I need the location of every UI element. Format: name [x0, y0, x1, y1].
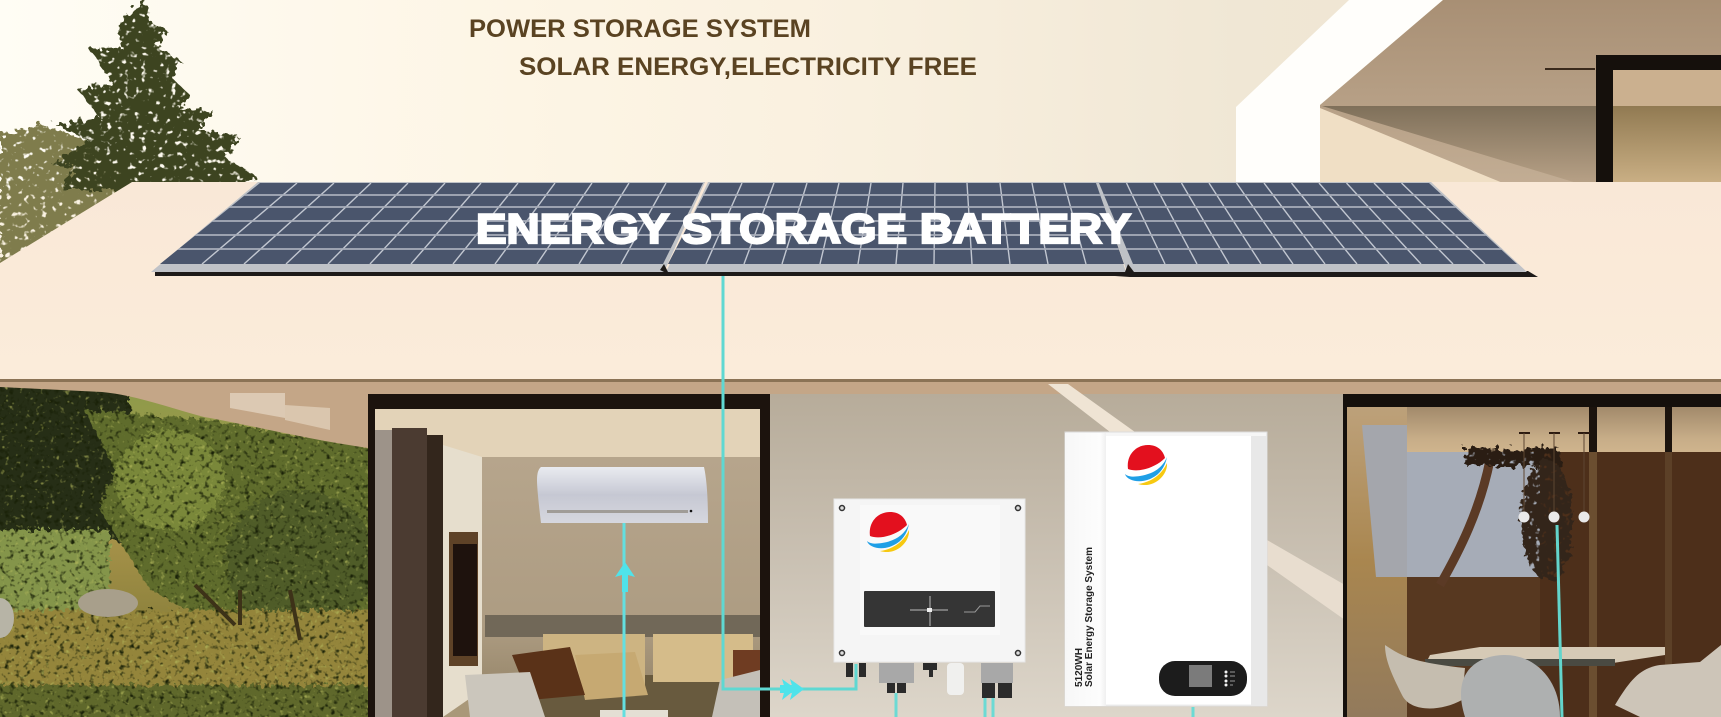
- roof soffit underside: [0, 379, 1721, 448]
- dining table: [1425, 647, 1665, 666]
- solar panel left: [151, 182, 705, 272]
- heading: power storage system: POWER STORAGE SYSTEM: [469, 15, 811, 43]
- battery control display: [1159, 661, 1247, 696]
- upper-right white wall band: [1236, 0, 1443, 190]
- subheading: solar energy, electricity free: SOLAR ENERGY,ELECTRICITY FREE: [519, 53, 977, 81]
- wiring from solar panels to inverter: [723, 276, 856, 689]
- mounting screws: [840, 506, 1020, 656]
- wiring up to air conditioner: [622, 523, 626, 717]
- flow arrow into inverter: [780, 679, 804, 700]
- inverter connectors: [846, 663, 1013, 698]
- right window into dining room: [1343, 394, 1721, 717]
- logo on inverter: [867, 512, 909, 552]
- dining chairs: [1385, 645, 1721, 717]
- room interior: [375, 409, 760, 717]
- battery capacity label: 5120WH: [1074, 648, 1085, 687]
- sofa with cushions: [485, 615, 760, 717]
- wiring to dining room lights: [1557, 525, 1562, 717]
- inverter output wiring: [896, 693, 993, 717]
- background wall and sky: [0, 0, 1721, 190]
- air conditioner: [537, 467, 708, 523]
- central wall section: [770, 384, 1345, 717]
- pendant lights: [1518, 433, 1590, 522]
- solar panel right: [1080, 182, 1540, 272]
- foliage behind pine at upper left: [0, 124, 140, 270]
- inverter display panel: [864, 591, 995, 627]
- battery output wiring: [1192, 707, 1194, 717]
- tree reflection: [1440, 448, 1573, 585]
- battery product label: Solar Energy Storage System: [1084, 547, 1095, 687]
- left garden landscape: [0, 380, 385, 717]
- panel junction notches: [660, 264, 1134, 272]
- left window into living room: [368, 394, 770, 717]
- upper-right interior room: [1320, 0, 1721, 190]
- roof slab: [0, 182, 1721, 381]
- inverter unit: [834, 499, 1025, 698]
- solar panel center: [650, 182, 1140, 272]
- pine tree at upper left: [52, 0, 256, 190]
- chairs and table: [465, 670, 760, 717]
- solar panel array: [100, 182, 1540, 277]
- glass mullions: [1589, 407, 1672, 717]
- battery storage unit: [1065, 432, 1267, 706]
- dining room interior: [1347, 407, 1721, 717]
- arrow to air conditioner: [615, 562, 635, 592]
- title: energy storage battery: ENERGY STORAGE BATTERY: [476, 205, 1131, 252]
- panel shadow: [155, 271, 1538, 277]
- wall picture: [449, 532, 478, 666]
- logo on battery: [1125, 445, 1167, 485]
